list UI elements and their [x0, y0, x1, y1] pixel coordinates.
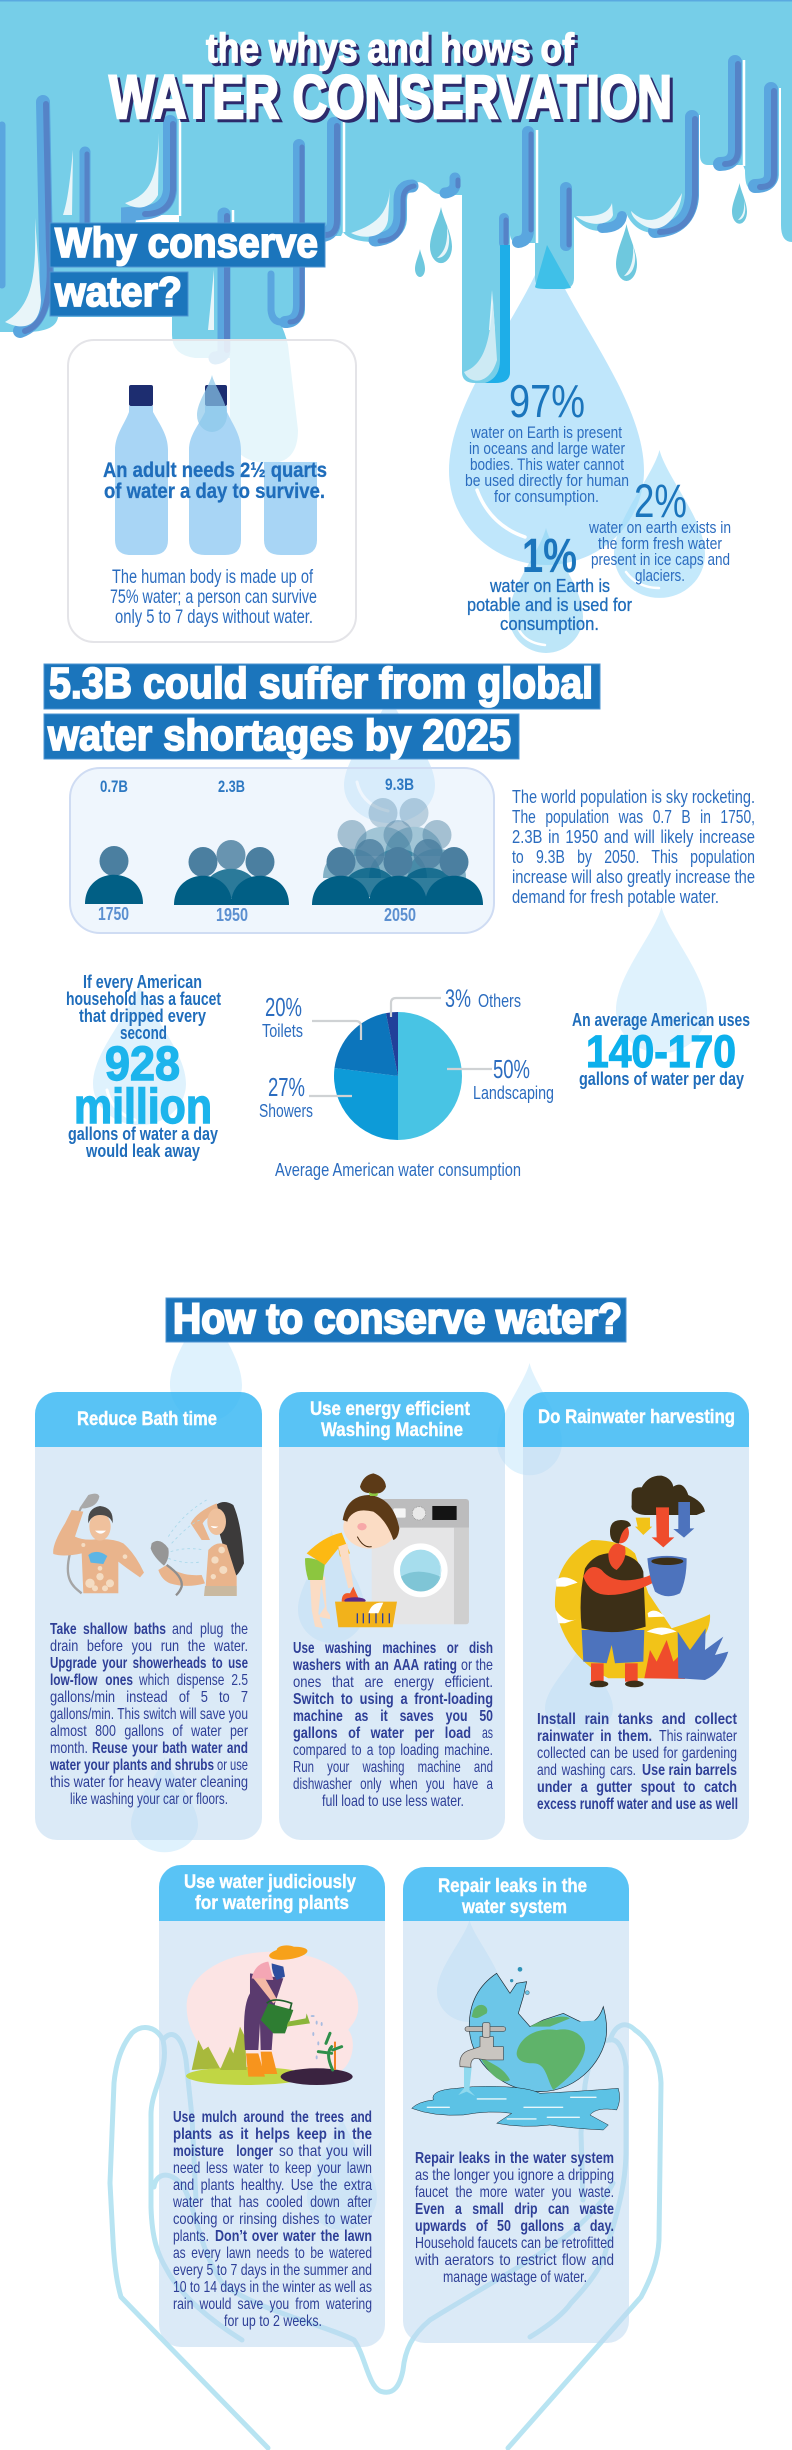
- text: human body facts: 75% water; a person can survive: [110, 586, 317, 608]
- card text: for up to 2 weeks.: [224, 2313, 322, 2330]
- labels: population values: 2.3B: [218, 777, 245, 796]
- section heading: how to conserve water: How to conserve water?: [173, 1295, 622, 1343]
- pie chart: water consumption: 3%: [445, 985, 471, 1013]
- card text: Don’t over water the lawn: [215, 2228, 372, 2245]
- card text: Install rain tanks and collect: [537, 1711, 738, 1728]
- stat: American daily use: [572, 1010, 750, 1089]
- panel: population growth: [70, 768, 494, 933]
- card heading: for watering plants: [195, 1892, 349, 1914]
- card text: month.: [50, 1740, 88, 1757]
- card text: Reuse your bath water and: [92, 1740, 248, 1757]
- card body: [35, 1447, 262, 1840]
- card text: like washing your car or floors.: [70, 1791, 228, 1808]
- panel: human water needs: [68, 340, 356, 642]
- card text: or use: [217, 1757, 248, 1774]
- card text: full load to use less water.: [322, 1793, 464, 1810]
- stat: 97%: water on Earth is present: [470, 423, 622, 442]
- card text: machine as it saves you 50: [293, 1708, 493, 1725]
- card text: Run your washing machine and: [293, 1759, 493, 1776]
- card heading: water system: [461, 1896, 567, 1918]
- card header: [523, 1392, 749, 1447]
- card text: Switch to using a front-loading: [293, 1691, 493, 1708]
- labels: years: [98, 904, 416, 925]
- card text: gallons/min instead of 5 to 7: [50, 1689, 248, 1706]
- stat: 2%: glaciers.: [635, 566, 685, 585]
- section heading: why conserve water: Why conserve: [55, 219, 318, 266]
- illustration: people showering: [53, 1494, 244, 1596]
- card text: and plug the: [172, 1621, 248, 1638]
- pie chart: water consumption: Toilets: [262, 1021, 303, 1041]
- labels: years: 2050: [384, 905, 416, 925]
- panel: repair leaks: [403, 1867, 629, 2343]
- stat: 1%: 1%: [522, 530, 577, 583]
- stat: 1%: [467, 530, 632, 634]
- card text: [414, 2150, 614, 2286]
- icon: 1% drop: [509, 528, 583, 653]
- labels: population values: 0.7B: [100, 777, 128, 796]
- card header: [159, 1865, 385, 1921]
- illustration: girl loading washing machine: [305, 1473, 469, 1628]
- illustration: leaking globe and faucet: [412, 1967, 620, 2130]
- card text: Use rain barrels: [642, 1762, 737, 1779]
- stat: 97%: 97%: [509, 375, 585, 427]
- card text: Even a small drip can waste: [415, 2201, 614, 2218]
- people: 2050: [312, 798, 483, 905]
- illustration: gardener watering a plant: [186, 1945, 358, 2085]
- stat: dripping faucets: million: [74, 1080, 212, 1134]
- card text: 10 to 14 days in the winter as well as: [173, 2279, 372, 2296]
- title: [109, 25, 672, 131]
- stat: dripping faucets: [66, 972, 221, 1161]
- card heading: Repair leaks in the: [438, 1875, 587, 1897]
- card text: so that you will: [279, 2143, 372, 2160]
- card text: manage wastage of water.: [443, 2269, 587, 2286]
- stat: 2%: present in ice caps and: [591, 550, 730, 569]
- card body: [403, 1921, 629, 2343]
- stat: 97%: be used directly for human: [465, 471, 629, 490]
- stat: 97%: in oceans and large water: [469, 439, 625, 458]
- card text: [537, 1711, 738, 1813]
- card text: washers with an AAA rating: [292, 1657, 457, 1674]
- card text: need less water to keep your lawn: [173, 2160, 372, 2177]
- section heading: why conserve water: [50, 219, 325, 316]
- callout: 2.5 quarts: An adult needs 2½ quarts: [103, 458, 327, 482]
- pie chart: water consumption: Others: [478, 991, 521, 1011]
- card text: every 5 to 7 days in the summer and: [173, 2262, 372, 2279]
- stat: 1%: water on Earth is: [489, 575, 610, 596]
- card text: gallons/min. This switch will save you: [50, 1706, 248, 1723]
- card text: Use mulch around the trees and: [173, 2109, 372, 2126]
- card text: as: [482, 1725, 493, 1742]
- pie chart: water consumption: Average American water consumption: [275, 1159, 521, 1180]
- stat: dripping faucets: that dripped every: [79, 1006, 206, 1026]
- background: cupped hands outline: [110, 2025, 661, 2448]
- card text: plants.: [173, 2228, 209, 2245]
- card heading: Do Rainwater harvesting: [538, 1406, 735, 1428]
- labels: population values: 9.3B: [385, 775, 414, 794]
- card text: plants as it helps keep in the: [173, 2126, 372, 2143]
- card body: [279, 1447, 505, 1840]
- stat: American daily use: gallons of water per day: [579, 1069, 744, 1089]
- panel: watering plants: [159, 1865, 385, 2347]
- people: 1950: [174, 840, 289, 905]
- card text: faucet the more water you waste.: [415, 2184, 614, 2201]
- stat: dripping faucets: second: [120, 1023, 167, 1043]
- card text: drain before you run the water.: [50, 1638, 248, 1655]
- card heading: Use energy efficient: [310, 1398, 470, 1420]
- text: human body facts: only 5 to 7 days without water.: [115, 606, 313, 628]
- stat: dripping faucets: If every American: [83, 972, 202, 992]
- labels: years: 1950: [216, 905, 248, 925]
- card text: as the longer you ignore a dripping: [415, 2167, 614, 2184]
- card text: Repair leaks in the water system: [415, 2150, 614, 2167]
- icon: small falling drops: [415, 183, 747, 281]
- icon: three water bottles: [115, 375, 317, 555]
- panel: energy efficient washing machine: [279, 1392, 505, 1840]
- card text: water that has cooled down after: [172, 2194, 373, 2211]
- card heading: Use water judiciously: [184, 1871, 356, 1893]
- section heading: 5.3B shortages: [44, 659, 600, 760]
- stat: dripping faucets: gallons of water a day: [68, 1124, 218, 1144]
- card text: low-flow ones: [50, 1672, 133, 1689]
- stat: dripping faucets: would leak away: [85, 1141, 200, 1161]
- card header: [279, 1392, 505, 1447]
- card text: Use washing machines or dish: [293, 1640, 493, 1657]
- card text: moisture longer: [173, 2143, 273, 2160]
- section heading: why conserve water: water?: [54, 268, 182, 315]
- stat: 2%: [588, 474, 731, 585]
- card text: [172, 2109, 373, 2330]
- pie chart: water consumption: Showers: [259, 1101, 313, 1121]
- illustration: person collecting rain: [555, 1476, 728, 1687]
- card text: Household faucets can be retrofitted: [415, 2235, 614, 2252]
- stat: dripping faucets: 928: [105, 1038, 180, 1091]
- card text: compared to a top loading machine.: [293, 1742, 493, 1759]
- icon: pale drop behind American usage: [616, 907, 707, 1053]
- section heading: 5.3B shortages: water shortages by 2025: [47, 711, 511, 760]
- labels: years: 1750: [98, 904, 129, 924]
- stat: American daily use: 140-170: [586, 1026, 736, 1077]
- callout: 2.5 quarts: [103, 458, 327, 503]
- card text: with aerators to restrict flow and: [414, 2252, 614, 2269]
- icon: pale drop behind leak stat: [93, 985, 186, 1125]
- card text: rainwater in them.: [537, 1728, 652, 1745]
- pie chart: water consumption: 50%: [493, 1054, 530, 1084]
- card text: ones that are energy efficient.: [293, 1674, 493, 1691]
- stat: dripping faucets: household has a faucet: [66, 989, 221, 1009]
- card text: which dispense 2.5: [138, 1672, 248, 1689]
- labels: population values: [100, 775, 414, 796]
- background: pale drops behind cards: [131, 1297, 613, 2230]
- pie chart: water consumption: 27%: [268, 1072, 305, 1102]
- card text: This rainwater: [659, 1728, 738, 1745]
- section heading: 5.3B shortages: 5.3B could suffer from global: [49, 659, 593, 708]
- stat: 97%: [465, 375, 629, 506]
- text: world population: [512, 786, 755, 907]
- card text: water your plants and shrubs: [49, 1757, 214, 1774]
- pie chart: water consumption: 20%: [265, 992, 302, 1022]
- callout: 2.5 quarts: of water a day to survive.: [104, 479, 325, 503]
- panel: rainwater harvesting: [523, 1392, 749, 1840]
- card heading: Reduce Bath time: [77, 1408, 217, 1430]
- pie chart: water consumption: [259, 985, 554, 1180]
- text: human body facts: [110, 566, 317, 628]
- people: 1750: [85, 846, 143, 904]
- icon: 2% drop: [614, 450, 705, 598]
- card text: as every lawn needs to be watered: [173, 2245, 372, 2262]
- stat: 2%: the form fresh water: [598, 534, 722, 553]
- card text: Upgrade your showerheads to use: [50, 1655, 248, 1672]
- big drop: 97%: [449, 245, 644, 565]
- pie chart: water consumption: Landscaping: [473, 1083, 554, 1103]
- card text: Take shallow baths: [50, 1621, 166, 1638]
- card text: [292, 1640, 493, 1810]
- icon: pale drop behind population panel: [344, 695, 435, 823]
- card text: [49, 1621, 249, 1808]
- stat: 97%: bodies. This water cannot: [470, 455, 624, 474]
- card body: [523, 1447, 749, 1840]
- stat: 97%: for consumption.: [494, 487, 599, 506]
- stat: 2%: water on earth exists in: [588, 518, 731, 537]
- card text: almost 800 gallons of water per: [50, 1723, 249, 1740]
- card text: upwards of 50 gallons a day.: [415, 2218, 614, 2235]
- card heading: [310, 1398, 470, 1441]
- stat: 2%: 2%: [634, 474, 687, 527]
- text: world population: demand for fresh potable water.: [512, 886, 719, 907]
- card heading: [438, 1875, 587, 1918]
- card header: [403, 1867, 629, 1921]
- card text: collected can be used for gardening: [537, 1745, 737, 1762]
- card text: and washing cars.: [537, 1762, 636, 1779]
- title: the whys and hows of: [206, 25, 574, 71]
- card text: this water for heavy water cleaning: [50, 1774, 248, 1791]
- card text: or the: [461, 1657, 493, 1674]
- card text: under a gutter spout to catch: [537, 1779, 737, 1796]
- card heading: Washing Machine: [321, 1419, 463, 1441]
- card text: gallons of water per load: [293, 1725, 471, 1742]
- card header: [35, 1392, 262, 1447]
- card text: dishwasher only when you have a: [293, 1776, 493, 1793]
- card body: [159, 1921, 385, 2347]
- card text: rain would save you from watering: [173, 2296, 372, 2313]
- card heading: [184, 1871, 356, 1914]
- icon: highlight on big drop: [477, 490, 525, 537]
- panel: reduce bath time: [35, 1392, 262, 1840]
- stat: 1%: potable and is used for: [467, 594, 632, 615]
- header: dripping water: [0, 0, 792, 463]
- text: human body facts: The human body is made up of: [112, 566, 313, 588]
- card text: cooking or rinsing dishes to water: [173, 2211, 373, 2228]
- card text: and plants healthy. Use the extra: [173, 2177, 372, 2194]
- stat: 1%: consumption.: [500, 613, 599, 634]
